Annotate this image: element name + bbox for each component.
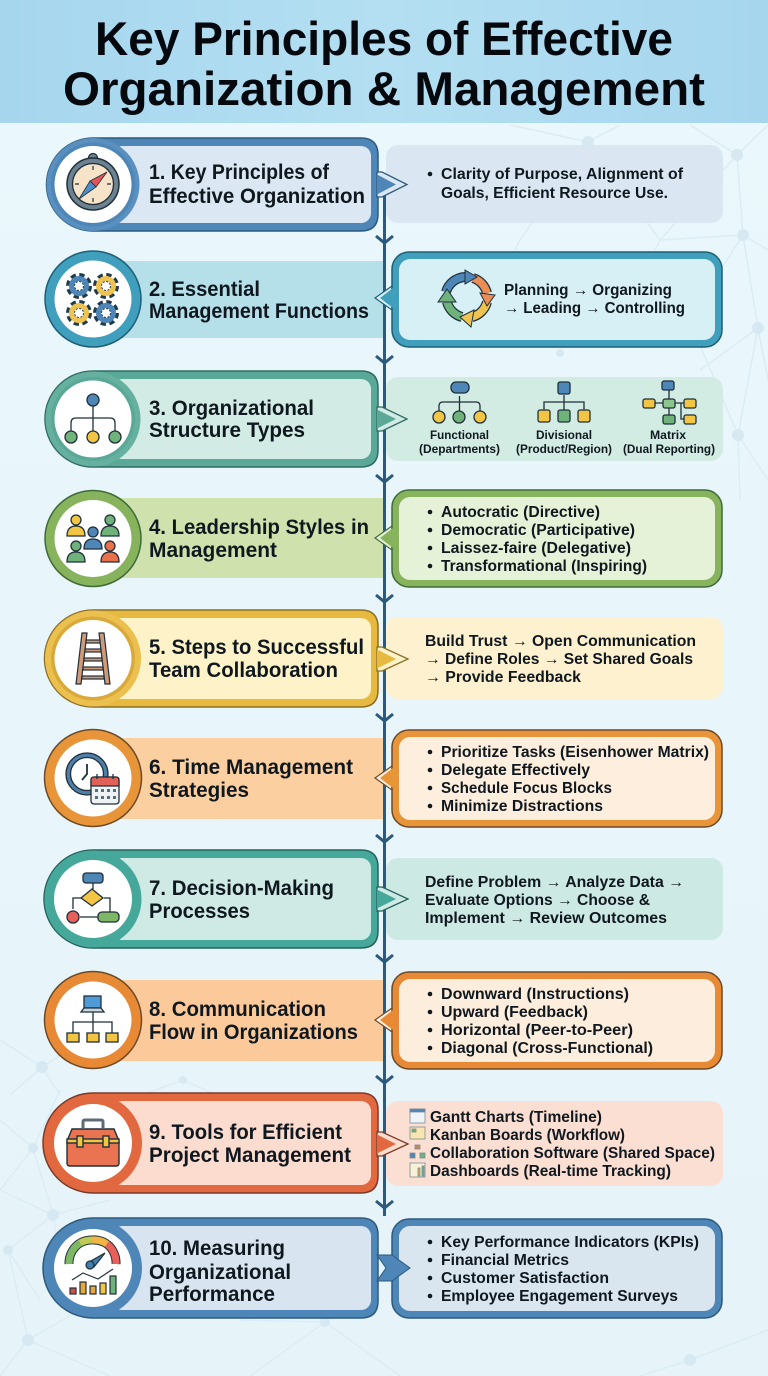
panel: row 8 heading: 8. Communication [149, 997, 326, 1021]
panel: row 1 heading: 1. Key Principles of [149, 160, 330, 184]
panel: row 6 heading [44, 730, 383, 826]
icon: gears [70, 278, 114, 322]
panel: row 3 details [386, 377, 723, 461]
panel: row 9 details: Dashboards (Real-time Tracking) [430, 1163, 671, 1180]
panel: row 9 details [386, 1101, 723, 1186]
panel: row 8 details: Horizontal (Peer-to-Peer) [441, 1022, 633, 1039]
panel: row 10 details: Customer Satisfaction [441, 1270, 609, 1287]
icon: cycle arrows [438, 270, 495, 327]
icon: org tree [65, 394, 121, 443]
panel: row 6 details [375, 730, 722, 827]
panel: row 6 heading: 6. Time Management [149, 755, 353, 779]
panel: row 5 details: → Provide Feedback [425, 669, 581, 686]
panel: row 2 heading: 2. Essential [149, 277, 260, 301]
panel: row 4 heading: 4. Leadership Styles in [149, 515, 369, 539]
panel: row 7 details [386, 858, 723, 940]
icon: clock and calendar [66, 753, 119, 804]
row 5: team collaboration [44, 610, 723, 707]
panel: row 3 heading: Structure Types [149, 418, 305, 442]
row 4: leadership styles [45, 490, 722, 587]
header banner [0, 0, 768, 123]
panel: row 10 details: Financial Metrics [441, 1252, 569, 1269]
panel: row 2 heading: Management Functions [149, 299, 369, 323]
panel: row 7 details: Implement → Review Outcomes [425, 910, 667, 927]
panel: row 9 details: Kanban Boards (Workflow) [430, 1127, 625, 1144]
panel: row 9 heading: Project Management [149, 1143, 351, 1167]
title: Organization & Management [63, 62, 705, 115]
title: Key Principles of Effective [95, 12, 673, 65]
panel: row 3 details: (Departments) [419, 442, 500, 456]
panel: row 8 details: Downward (Instructions) [441, 986, 629, 1003]
panel: row 1 details: Goals, Efficient Resource Use. [441, 185, 668, 202]
panel: row 6 details: Schedule Focus Blocks [441, 780, 612, 797]
panel: row 9 heading [43, 1093, 408, 1193]
panel: row 5 heading [44, 610, 408, 707]
panel: row 8 heading: Flow in Organizations [149, 1020, 358, 1044]
panel: row 1 heading: Effective Organization [149, 184, 365, 208]
panel: row 10 heading: 10. Measuring [149, 1236, 285, 1260]
panel: row 7 details: Evaluate Options → Choose & [425, 892, 650, 909]
panel: row 3 heading [45, 371, 407, 467]
panel: row 4 details: Autocratic (Directive) [441, 504, 600, 521]
icon: functional chart [433, 382, 486, 423]
panel: row 8 heading [44, 972, 383, 1068]
row 7: decision making [44, 850, 723, 948]
panel: row 9 details: Collaboration Software (Shared Space) [430, 1145, 715, 1162]
panel: row 3 details: Matrix [650, 428, 686, 442]
panel: row 6 details: Minimize Distractions [441, 798, 603, 815]
row 9: project tools [43, 1093, 723, 1193]
panel: row 1 details: Clarity of Purpose, Alignment of [441, 166, 684, 183]
icon: matrix chart [643, 381, 696, 424]
row 3: structure types [45, 371, 723, 467]
panel: row 9 details: Gantt Charts (Timeline) [430, 1109, 602, 1126]
panel: row 3 details: (Dual Reporting) [623, 442, 715, 456]
panel: row 9 heading: 9. Tools for Efficient [149, 1120, 342, 1144]
icon: flowchart [67, 873, 119, 923]
panel: row 10 heading: Performance [149, 1282, 275, 1306]
panel: row 8 details: Diagonal (Cross-Functional) [441, 1040, 653, 1057]
panel: row 2 heading [45, 251, 383, 347]
icon: team people [67, 515, 119, 562]
panel: row 4 heading: Management [149, 538, 277, 562]
panel: row 2 details: Planning → Organizing [504, 282, 672, 299]
panel: row 3 details: (Product/Region) [516, 442, 612, 456]
panel: row 8 details [375, 972, 722, 1069]
panel: row 4 details [375, 490, 722, 587]
icon: gauge and bar chart [69, 1240, 116, 1294]
panel: row 1 details [386, 145, 723, 223]
panel: row 10 heading: Organizational [149, 1260, 291, 1284]
row 8: communication flow [44, 972, 722, 1069]
panel: row 2 details [375, 252, 722, 347]
panel: row 7 heading: Processes [149, 899, 250, 923]
panel: row 4 details: Transformational (Inspiring) [441, 558, 647, 575]
panel: row 8 details: Upward (Feedback) [441, 1004, 588, 1021]
icon: ladder [76, 633, 110, 684]
panel: row 2 details: → Leading → Controlling [504, 300, 685, 317]
row 6: time management [44, 730, 722, 827]
icon: hierarchy with laptop [67, 996, 118, 1042]
panel: row 4 heading [45, 490, 383, 586]
row 1: key principles [46, 138, 723, 231]
panel: row 5 details [386, 617, 723, 699]
panel: row 1 heading [46, 138, 407, 231]
panel: row 10 heading [43, 1218, 378, 1318]
panel: row 6 heading: Strategies [149, 778, 249, 802]
icon: compass [67, 154, 119, 210]
panel: row 5 heading: Team Collaboration [149, 658, 338, 682]
panel: row 4 details: Democratic (Participative) [441, 522, 635, 539]
panel: row 7 heading: 7. Decision-Making [149, 876, 334, 900]
arrow: row 10 connector [377, 1255, 410, 1281]
row 10: measuring performance [43, 1218, 722, 1318]
row 2: management functions [45, 251, 722, 347]
title [63, 12, 705, 115]
panel: row 5 details: → Define Roles → Set Shared Goals [425, 651, 693, 668]
panel: row 5 heading: 5. Steps to Successful [149, 635, 364, 659]
panel: row 10 details [392, 1219, 722, 1318]
icon: toolbox [67, 1120, 119, 1166]
panel: row 3 heading: 3. Organizational [149, 396, 314, 420]
panel: row 6 details: Prioritize Tasks (Eisenhower Matrix) [441, 744, 709, 761]
panel: row 7 heading [44, 850, 408, 948]
panel: row 5 details: Build Trust → Open Communication [425, 633, 696, 650]
panel: row 3 details: Divisional [536, 428, 592, 442]
panel: row 10 details: Employee Engagement Surveys [441, 1288, 678, 1305]
icon: divisional chart [538, 382, 590, 422]
panel: row 4 details: Laissez-faire (Delegative) [441, 540, 631, 557]
panel: row 7 details: Define Problem → Analyze Data → [425, 874, 684, 891]
icon: small tool icons [410, 1109, 425, 1177]
panel: row 3 details: Functional [430, 428, 489, 442]
panel: row 10 details: Key Performance Indicators (KPIs) [441, 1234, 699, 1251]
timeline connector [376, 190, 393, 1216]
panel: row 6 details: Delegate Effectively [441, 762, 590, 779]
